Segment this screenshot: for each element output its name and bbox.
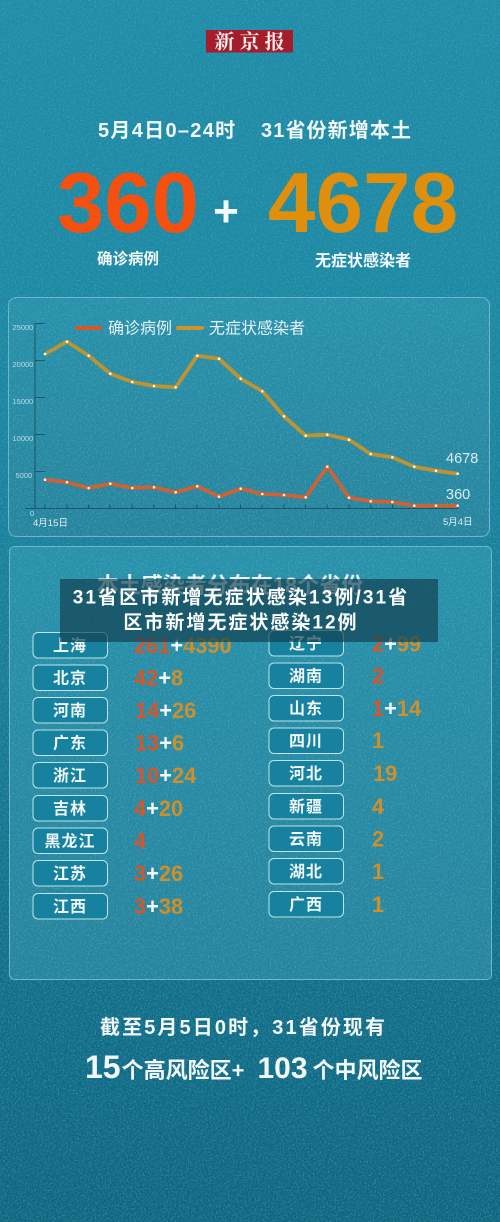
- left column provinces: 河南: [53, 702, 87, 720]
- end value labels: [446, 451, 478, 503]
- left column provinces: 261+4390: [134, 633, 232, 658]
- headline figures: [57, 156, 458, 270]
- chart axes: [25, 324, 458, 508]
- left column provinces: 13+6: [135, 730, 184, 756]
- footer: risk areas: [85, 1016, 423, 1085]
- y axis labels: 0: [30, 509, 34, 518]
- y axis labels: 25000: [12, 323, 33, 332]
- confirmed label: 确诊病例: [97, 249, 159, 268]
- right column provinces: 四川: [289, 734, 323, 750]
- left column provinces: 3+26: [134, 861, 183, 886]
- asymptomatic number: 4678: [268, 156, 458, 251]
- heading: date and scope: 5月4日0–24时: [98, 119, 236, 142]
- x axis labels: [33, 517, 473, 529]
- right column provinces: 湖南: [289, 668, 323, 686]
- left column provinces: 4: [134, 828, 146, 854]
- right column provinces: 2: [372, 664, 384, 688]
- y axis labels: 20000: [12, 360, 33, 369]
- right column provinces: 2+99: [372, 632, 421, 656]
- left column provinces: 广东: [53, 734, 87, 752]
- heading: date and scope: [98, 119, 412, 142]
- left column provinces: 黑龙江: [44, 832, 96, 850]
- y axis labels: 15000: [12, 397, 33, 406]
- right column provinces: 新疆: [289, 797, 323, 816]
- right column provinces: 4: [372, 794, 384, 819]
- panel heading: 本土感染者分布在18个省份: [97, 573, 363, 598]
- left column provinces: 42+8: [134, 666, 183, 690]
- panel: provincial distribution: [10, 546, 492, 980]
- left column provinces: 3+38: [134, 894, 183, 919]
- title overlay banner: 区市新增无症状感染12例: [123, 610, 359, 634]
- heading: date and scope: 31省份新增本土: [261, 119, 412, 142]
- left column provinces: 吉林: [53, 800, 87, 818]
- x axis labels: 4月15日: [33, 518, 68, 529]
- right column provinces: [269, 630, 421, 917]
- confirmed cases number: 360: [57, 156, 199, 251]
- right column provinces: 1+14: [372, 696, 421, 721]
- left column provinces: 江苏: [53, 864, 87, 883]
- legend: 无症状感染者: [209, 320, 305, 338]
- plus sign: +: [213, 187, 239, 236]
- y axis labels: [12, 323, 34, 518]
- footer line one: 截至5月5日0时，31省份现有: [100, 1016, 387, 1039]
- right column provinces: 湖北: [289, 863, 323, 881]
- left column provinces: 4+20: [134, 796, 183, 821]
- title overlay banner: 31省区市新增无症状感染13例/31省: [73, 586, 409, 608]
- line: asymptomatic: [44, 340, 459, 475]
- right column provinces: 1: [372, 728, 384, 753]
- legend: [77, 320, 305, 338]
- right column provinces: 辽宁: [289, 634, 323, 653]
- right column provinces: 19: [373, 761, 397, 786]
- right column provinces: 2: [372, 826, 384, 852]
- y axis labels: 10000: [12, 434, 33, 443]
- right column provinces: 云南: [289, 830, 323, 848]
- right column provinces: 河北: [289, 765, 323, 783]
- right column provinces: 广西: [289, 896, 323, 914]
- left column provinces: 10+24: [135, 763, 196, 788]
- logo: 新京报: 新京报: [214, 26, 290, 54]
- line: confirmed: [44, 465, 459, 507]
- legend: 确诊病例: [108, 320, 172, 338]
- end value labels: 360: [446, 487, 470, 503]
- left column provinces: [33, 632, 232, 919]
- left column provinces: 北京: [53, 668, 87, 688]
- x axis labels: 5月4日: [443, 517, 473, 528]
- right column provinces: 1: [372, 892, 384, 917]
- right column provinces: 1: [372, 859, 384, 884]
- end value labels: 4678: [446, 451, 478, 467]
- left column provinces: 上海: [53, 637, 87, 655]
- left column provinces: 浙江: [53, 767, 87, 785]
- footer line two: 15个高风险区+ 103个中风险区: [85, 1049, 423, 1085]
- title overlay banner: [60, 579, 438, 642]
- left column provinces: 江西: [53, 898, 87, 916]
- left column provinces: 14+26: [135, 698, 196, 723]
- right column provinces: 山东: [289, 699, 323, 718]
- asymptomatic label: 无症状感染者: [315, 251, 411, 270]
- panel: line chart: [8, 298, 490, 536]
- y axis labels: 5000: [16, 471, 32, 480]
